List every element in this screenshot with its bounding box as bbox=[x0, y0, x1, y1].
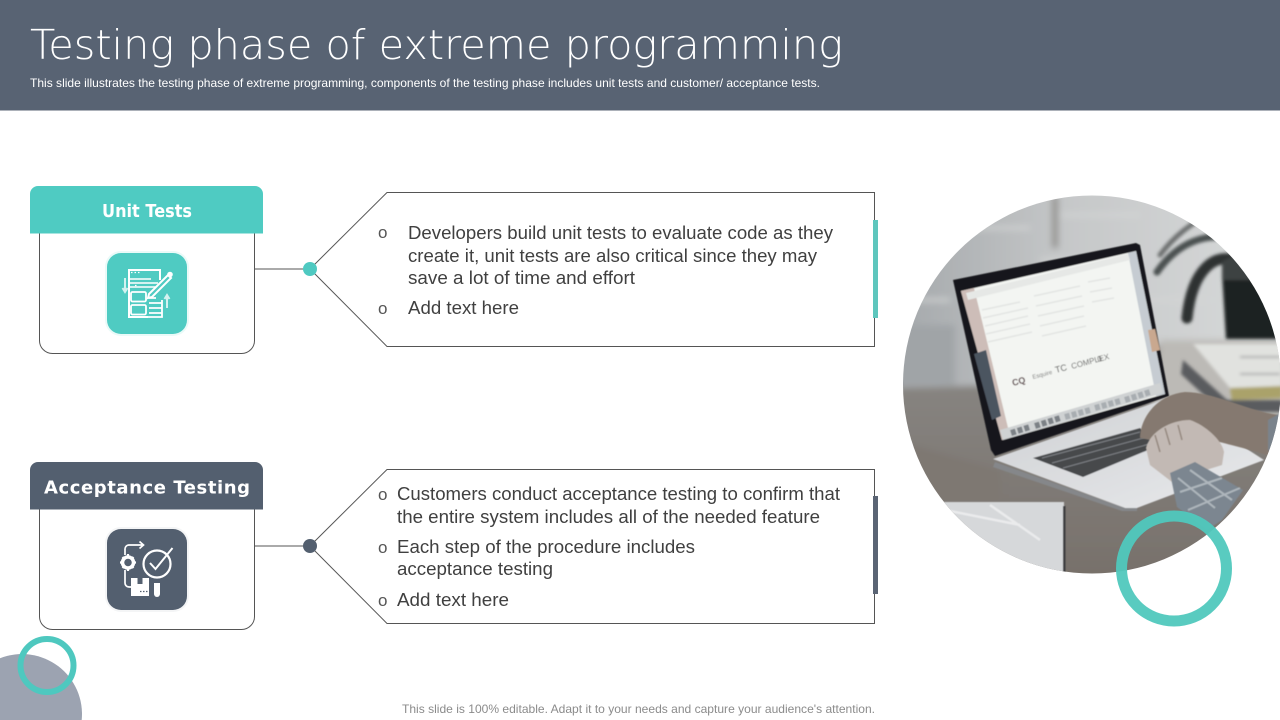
card body bbox=[39, 233, 255, 354]
laptop bbox=[953, 243, 1264, 511]
card heading: acceptance testing bbox=[30, 462, 263, 510]
title: Testing phase of extreme programming bbox=[30, 21, 843, 69]
screen logos: CQ bbox=[1011, 375, 1027, 388]
decorative ring: photo bbox=[1122, 516, 1226, 621]
books bbox=[1181, 344, 1280, 412]
text block: acceptance testing bullets bbox=[378, 484, 840, 610]
text block: unit tests bullets: o bbox=[378, 299, 387, 318]
panel: acceptance testing details bbox=[310, 470, 878, 624]
keyboard bbox=[1033, 428, 1160, 477]
connector: acceptance testing bbox=[255, 470, 878, 624]
card heading: unit tests: Unit Tests bbox=[102, 201, 192, 222]
text block: acceptance testing bullets: o bbox=[378, 485, 387, 504]
laptop: 0 bbox=[1096, 354, 1103, 364]
laptop base bbox=[993, 398, 1264, 508]
decorative circle: bottom left bbox=[0, 654, 82, 720]
screen bbox=[961, 251, 1165, 440]
card body bbox=[39, 509, 255, 630]
text block: acceptance testing bullets: acceptance testing bbox=[397, 559, 553, 579]
connector: unit tests bbox=[255, 192, 878, 346]
plant bbox=[1157, 206, 1280, 339]
hands and sleeve bbox=[1140, 392, 1280, 530]
text block: unit tests bullets: Add text here bbox=[408, 298, 519, 318]
icon: document and pencil bbox=[105, 251, 189, 336]
text block: unit tests bullets: create it, unit tests are also critical since they may bbox=[408, 246, 817, 266]
screen bezel bbox=[953, 243, 1169, 456]
text block: acceptance testing bullets: o bbox=[378, 591, 387, 610]
text block: acceptance testing bullets: o bbox=[378, 538, 387, 557]
decorative ring: bottom left bbox=[20, 639, 74, 692]
icon: gear, box and magnifier bbox=[105, 527, 189, 612]
laptop: TC bbox=[1054, 362, 1069, 375]
text block: acceptance testing bullets: the entire system includes all of the needed feature bbox=[397, 507, 820, 527]
subtitle: This slide illustrates the testing phase of extreme programming, components of the testing phase includes unit tests and customer/ acceptance tests. bbox=[30, 76, 820, 90]
card heading: acceptance testing: Acceptance Testing bbox=[44, 478, 250, 498]
text block: acceptance testing bullets: Each step of the procedure includes bbox=[397, 537, 695, 557]
laptop: COMPLEX bbox=[1070, 352, 1111, 371]
text block: acceptance testing bullets: Add text here bbox=[397, 590, 509, 610]
text block: unit tests bullets bbox=[378, 223, 833, 318]
text block: acceptance testing bullets: Customers conduct acceptance testing to confirm that bbox=[397, 484, 840, 504]
text block: unit tests bullets: save a lot of time and effort bbox=[408, 268, 635, 288]
wall and desk backdrop bbox=[895, 190, 1280, 590]
laptop: Esquire bbox=[1032, 370, 1054, 381]
header band bbox=[0, 0, 1280, 110]
marble box and desk edge bbox=[944, 501, 1066, 572]
panel: unit tests details bbox=[310, 192, 878, 346]
text block: unit tests bullets: Developers build unit tests to evaluate code as they bbox=[408, 223, 833, 243]
text block: unit tests bullets: o bbox=[378, 223, 387, 242]
photo: laptop on a desk bbox=[895, 190, 1280, 590]
card heading: unit tests bbox=[30, 186, 263, 234]
connector dot bbox=[303, 262, 317, 276]
connector dot bbox=[303, 539, 317, 553]
footer note: This slide is 100% editable. Adapt it to your needs and capture your audience's attention. bbox=[402, 702, 875, 716]
panel: acceptance testing card bbox=[30, 462, 263, 630]
panel: unit tests card bbox=[30, 186, 263, 354]
